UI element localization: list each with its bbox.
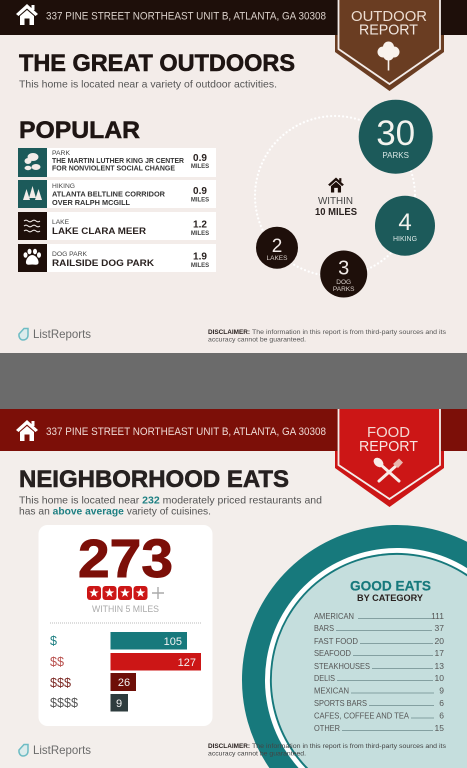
- bubble: hiking: [375, 196, 435, 256]
- heading: popular: POPULAR: [19, 117, 140, 144]
- popular row: park: FOR NONVIOLENT SOCIAL CHANGE: [52, 166, 175, 172]
- popular row: park: 0.9: [193, 153, 207, 164]
- category list: AMERICAN: [314, 611, 354, 621]
- category list: 9: [439, 686, 444, 696]
- disclaimer: [208, 329, 447, 344]
- total count: 273: [78, 529, 173, 589]
- header bar: outdoor report address: [0, 0, 467, 35]
- subtitle: outdoor activities: This home is located near a variety of outdoor activities.: [19, 78, 277, 90]
- badge: food report: REPORT: [359, 439, 418, 455]
- category list: BARS: [314, 623, 334, 633]
- chart: activities within 10 miles: [255, 100, 435, 298]
- heading: good eats: GOOD EATS: [350, 578, 431, 594]
- popular row: lake: LAKE CLARA MEER: [52, 226, 146, 237]
- disclaimer: accuracy cannot be guaranteed.: [208, 336, 306, 344]
- popular row: dog park: 1.9: [193, 252, 207, 262]
- popular row: lake: [18, 212, 216, 240]
- icon: small home: [328, 177, 344, 193]
- label: within 10 miles: 10 MILES: [315, 207, 357, 218]
- category list: [314, 611, 444, 733]
- category list: SPORTS BARS: [314, 698, 367, 708]
- bubble: dog parks: PARKS: [333, 286, 355, 293]
- intro text: restaurants: [19, 494, 322, 518]
- popular row: lake: 1.2: [193, 220, 207, 230]
- category list: STEAKHOUSES: [314, 661, 370, 671]
- badge: outdoor report: REPORT: [359, 22, 418, 38]
- popular row: dog park: RAILSIDE DOG PARK: [52, 258, 154, 269]
- bubble: hiking: HIKING: [393, 236, 417, 243]
- disclaimer: DISCLAIMER:: [208, 329, 250, 336]
- category list: MEXICAN: [314, 686, 349, 696]
- category list: 13: [435, 661, 444, 671]
- icon: park: [24, 153, 40, 170]
- label: within 10 miles: WITHIN: [318, 196, 353, 207]
- logo: listreports: ListReports: [33, 327, 91, 341]
- popular row: park: [18, 148, 216, 177]
- category list: 6: [439, 698, 444, 708]
- category list: 20: [435, 636, 444, 646]
- disclaimer: The information in this report is from third-party sources and its: [252, 743, 447, 750]
- bubble: lakes: [256, 227, 298, 269]
- title: the great outdoors: THE GREAT OUTDOORS: [19, 50, 295, 77]
- popular row: hiking: [18, 180, 216, 208]
- intro text: restaurants: This home is located near 232 moderately priced restaurants and: [19, 494, 322, 506]
- category list: SEAFOOD: [314, 648, 351, 658]
- category list: OTHER: [314, 723, 340, 733]
- bubble: dog parks: 3: [338, 258, 349, 280]
- address: 337 PINE STREET NORTHEAST UNIT B, ATLANTA, GA 30308: [46, 10, 326, 22]
- logo: listreports: ListReports: [33, 743, 91, 757]
- intro text: restaurants: has an above average variety of cuisines.: [19, 506, 211, 518]
- category list: CAFES, COFFEE AND TEA: [314, 710, 409, 720]
- bubble: dog parks: [320, 250, 367, 298]
- disclaimer: accuracy cannot be guaranteed.: [208, 750, 306, 758]
- bubble: parks: [359, 100, 433, 174]
- category list: 15: [435, 723, 444, 733]
- category list: 37: [435, 623, 444, 633]
- icon: home: [16, 420, 38, 441]
- label: within 5 miles: WITHIN 5 MILES: [92, 604, 159, 614]
- popular row: park: THE MARTIN LUTHER KING JR CENTER: [52, 158, 184, 165]
- popular row: hiking: HIKING: [52, 184, 75, 190]
- popular row: park: PARK: [52, 151, 70, 157]
- icon: waves: [24, 220, 40, 232]
- bubble: parks: PARKS: [382, 151, 409, 160]
- popular row: lake: LAKE: [52, 220, 69, 226]
- bar chart: price levels: $$$: [50, 676, 71, 690]
- bar chart: price levels: [50, 632, 201, 712]
- header bar: food report address: [0, 409, 467, 451]
- label: within 10 miles: [315, 196, 357, 218]
- popular row: dog park: DOG PARK: [52, 252, 87, 258]
- bubble: lakes: 2: [272, 236, 282, 257]
- icon: home: [16, 4, 38, 25]
- bubble: dog parks: DOG: [336, 279, 351, 286]
- popular row: hiking: 0.9: [193, 186, 207, 197]
- icon: paw: [24, 249, 41, 265]
- category list: 17: [435, 648, 444, 658]
- bubble: parks: 30: [376, 114, 415, 153]
- popular row: lake: MILES: [191, 231, 209, 237]
- disclaimer: DISCLAIMER:: [208, 743, 250, 750]
- category list: 6: [439, 710, 444, 720]
- badge: outdoor report: [335, 0, 444, 91]
- subheading: by category: BY CATEGORY: [357, 593, 423, 603]
- icon: pine trees: [23, 186, 42, 200]
- category list: 10: [435, 673, 444, 683]
- bar chart: price levels: $$$$: [50, 696, 78, 710]
- disclaimer: [208, 743, 447, 758]
- icon: tree: [378, 42, 400, 70]
- bar chart: price levels: $$: [50, 655, 64, 669]
- address: 337 PINE STREET NORTHEAST UNIT B, ATLANTA, GA 30308: [46, 426, 326, 438]
- disclaimer: The information in this report is from third-party sources and its: [252, 329, 447, 336]
- icon: fork and spoon: [372, 456, 403, 481]
- popular row: dog park: [18, 244, 216, 272]
- bubble: lakes: LAKES: [267, 255, 288, 262]
- popular row: hiking: MILES: [191, 198, 209, 204]
- bubble: hiking: 4: [398, 209, 412, 236]
- bar chart: price levels: 9: [116, 698, 122, 710]
- popular row: dog park: MILES: [191, 263, 209, 269]
- badge: outdoor report: OUTDOOR: [351, 8, 427, 25]
- popular row: park: MILES: [191, 164, 209, 170]
- title: neighborhood eats: NEIGHBORHOOD EATS: [19, 466, 289, 493]
- category list: DELIS: [314, 673, 335, 683]
- badge: food report: [335, 409, 444, 507]
- popular row: hiking: OVER RALPH MCGILL: [52, 198, 130, 207]
- category list: FAST FOOD: [314, 636, 358, 646]
- popular row: hiking: ATLANTA BELTLINE CORRIDOR: [52, 190, 166, 198]
- badge: food report: FOOD: [367, 424, 410, 441]
- bar chart: price levels: $: [50, 634, 57, 648]
- star rating: [87, 586, 164, 600]
- bar chart: price levels: 105: [164, 636, 182, 648]
- panel: good eats circle: [242, 525, 467, 768]
- card: restaurant totals: [38, 525, 212, 726]
- bar chart: price levels: 127: [178, 657, 196, 669]
- category list: 111: [431, 611, 444, 621]
- bar chart: price levels: 26: [118, 677, 130, 689]
